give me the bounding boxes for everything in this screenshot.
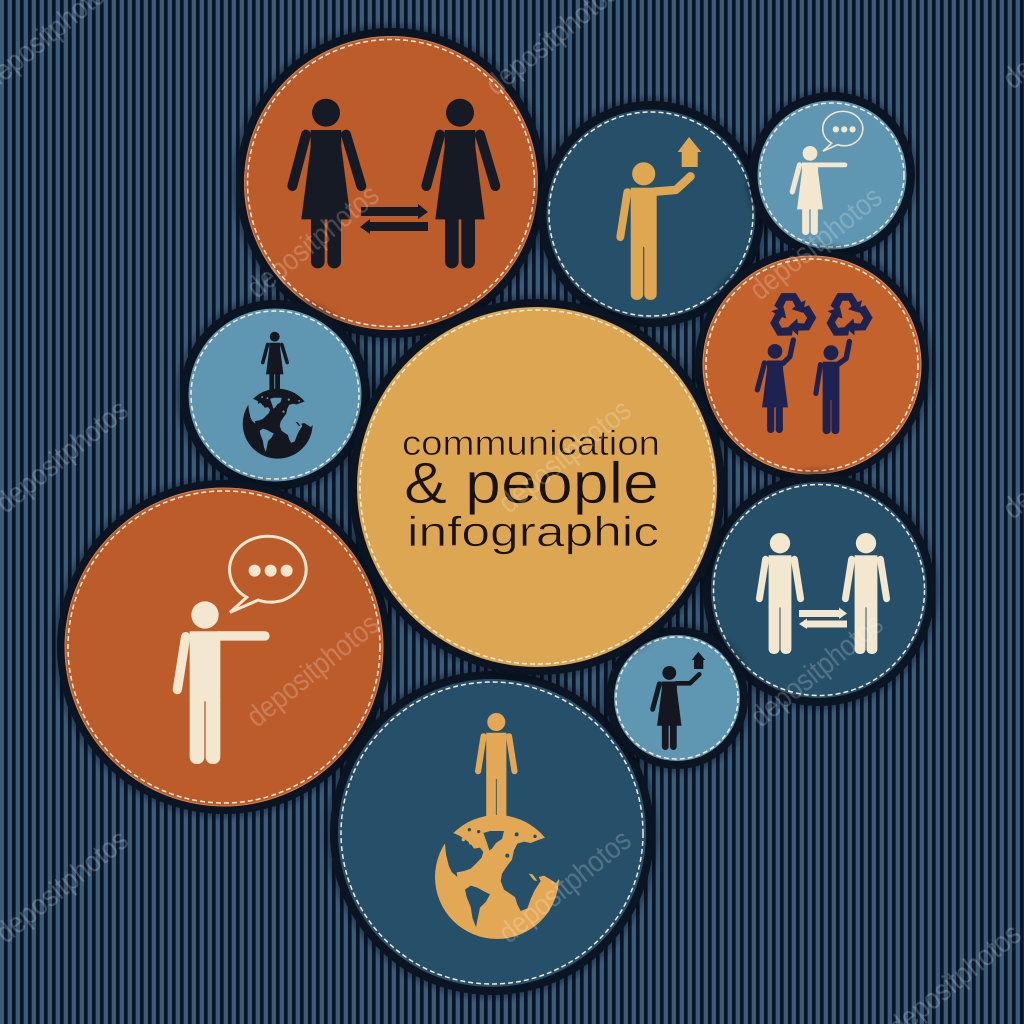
icon: right man [845, 533, 887, 654]
panel: man on globe [328, 669, 656, 997]
watermark: depositphotos [492, 393, 638, 520]
watermark: depositphotos [744, 607, 890, 734]
icon: man pointing [177, 601, 265, 764]
icon: up arrow [692, 652, 705, 669]
watermark: depositphotos [240, 178, 386, 305]
panel: woman on globe [178, 298, 372, 492]
icon: man raising arm [816, 342, 849, 434]
title [402, 424, 660, 555]
panel: recycling couple [693, 246, 931, 484]
icon: up arrow [678, 137, 701, 167]
icon: speech bubble [823, 111, 863, 151]
watermark: depositphotos [240, 607, 386, 734]
panel: two women exchanging [234, 26, 548, 340]
icon: recycle symbol right [822, 293, 876, 342]
panel: man speaking [55, 478, 393, 816]
panel: woman speaking [748, 91, 916, 259]
icon: man standing [478, 713, 515, 820]
icon: man with raised arm [620, 162, 691, 300]
panel: woman raising arrow [604, 625, 750, 771]
panel: central title badge [347, 297, 727, 677]
watermark: depositphotos [743, 180, 889, 307]
icon: exchange arrows [360, 204, 428, 234]
icon: globe [435, 815, 568, 939]
watermark: depositphotos [492, 823, 638, 950]
icon: woman standing [263, 332, 287, 392]
title: & people [404, 451, 659, 516]
icon: right woman [426, 99, 495, 268]
icon: left man [759, 533, 801, 654]
panel: man raising arrow [536, 99, 766, 329]
icon: woman pointing [792, 146, 845, 235]
title: infographic [407, 508, 659, 555]
icon: recycle symbol left [765, 293, 820, 342]
icon: exchange arrows [799, 608, 847, 629]
icon: left woman [292, 99, 361, 268]
icon: woman raising arm [757, 340, 793, 433]
title: communication [402, 424, 660, 463]
panel: two men exchanging [701, 472, 937, 708]
icon: globe [243, 389, 318, 459]
icon: woman with raised arm [653, 666, 699, 750]
icon: speech bubble [230, 536, 306, 612]
